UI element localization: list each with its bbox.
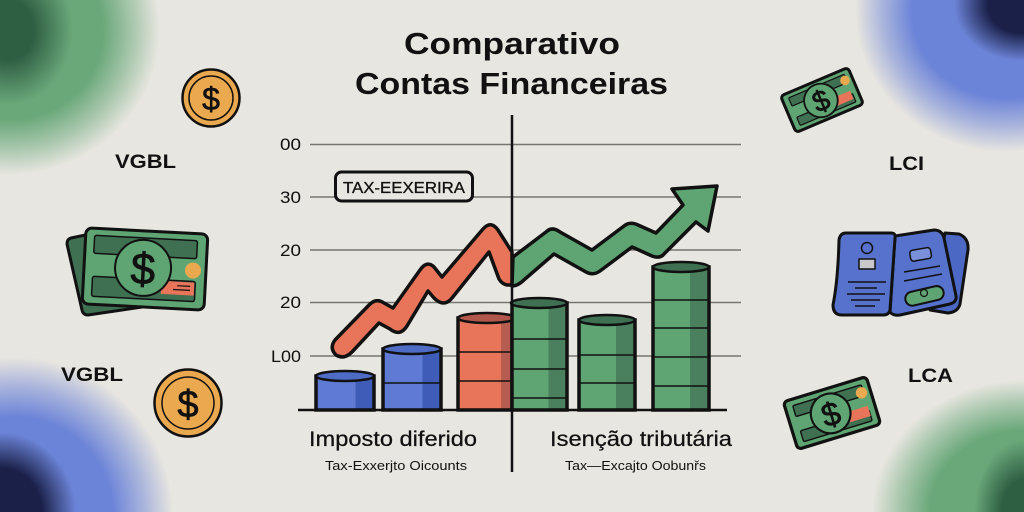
chart — [271, 115, 741, 472]
tag: tax label: TAX-EEXERIRA — [343, 180, 466, 197]
arrow: green trend — [512, 186, 717, 286]
label: VGBL top: VGBL — [115, 152, 176, 173]
background blob: bottom-left blue — [0, 350, 180, 512]
y axis labels: 30 — [280, 188, 301, 207]
axis baseline — [298, 409, 727, 411]
label: Imposto diferido: Tax-Exxerjto Oicounts — [325, 458, 468, 473]
background blob: top-left green — [0, 0, 170, 180]
icon: blue documents — [833, 230, 968, 315]
background blob: top-right blue — [850, 0, 1024, 160]
icon: banknote bottom right: $ — [817, 394, 845, 434]
y axis labels: 00 — [280, 135, 301, 154]
title — [355, 26, 668, 101]
bar: blue medium — [383, 344, 441, 410]
label: Imposto diferido: Imposto diferido — [309, 428, 477, 451]
label: Isenção tributária: Tax—Excajto Oobunřs — [565, 458, 707, 473]
tag: tax label — [336, 172, 472, 201]
title: Contas Financeiras — [355, 66, 668, 101]
label: Isenção tributária: Isenção tributária — [550, 428, 732, 451]
bar: green 3 — [653, 262, 709, 410]
bar: blue short — [316, 371, 374, 410]
bar: green 2 — [579, 315, 635, 410]
y axis labels — [271, 135, 301, 366]
y axis labels: L00 — [271, 347, 301, 366]
icon: coin top — [182, 70, 240, 126]
label: VGBL bottom: VGBL — [61, 365, 123, 386]
label: LCI: LCI — [889, 154, 924, 175]
label: Imposto diferido — [309, 428, 477, 473]
y axis labels: 20 — [280, 293, 301, 312]
arrow: red trend — [332, 225, 512, 357]
y axis labels: 20 — [280, 241, 301, 260]
label: Isenção tributária — [550, 428, 732, 473]
icon: banknote top right: $ — [808, 84, 835, 119]
icon: banknote top right — [781, 67, 863, 133]
icon: coin bottom: $ — [177, 384, 199, 426]
icon: coin top: $ — [202, 81, 220, 117]
icon: banknotes large: $ — [129, 244, 156, 295]
icon: banknotes large — [67, 228, 208, 315]
divider line — [511, 115, 513, 472]
title: Comparativo — [404, 26, 620, 61]
background blob: bottom-right green — [870, 378, 1024, 512]
bar: green 1 — [511, 298, 567, 410]
bar: red — [458, 313, 516, 410]
icon: banknote bottom right — [783, 377, 881, 449]
icon: coin bottom — [154, 370, 222, 436]
label: LCA: LCA — [908, 366, 953, 387]
